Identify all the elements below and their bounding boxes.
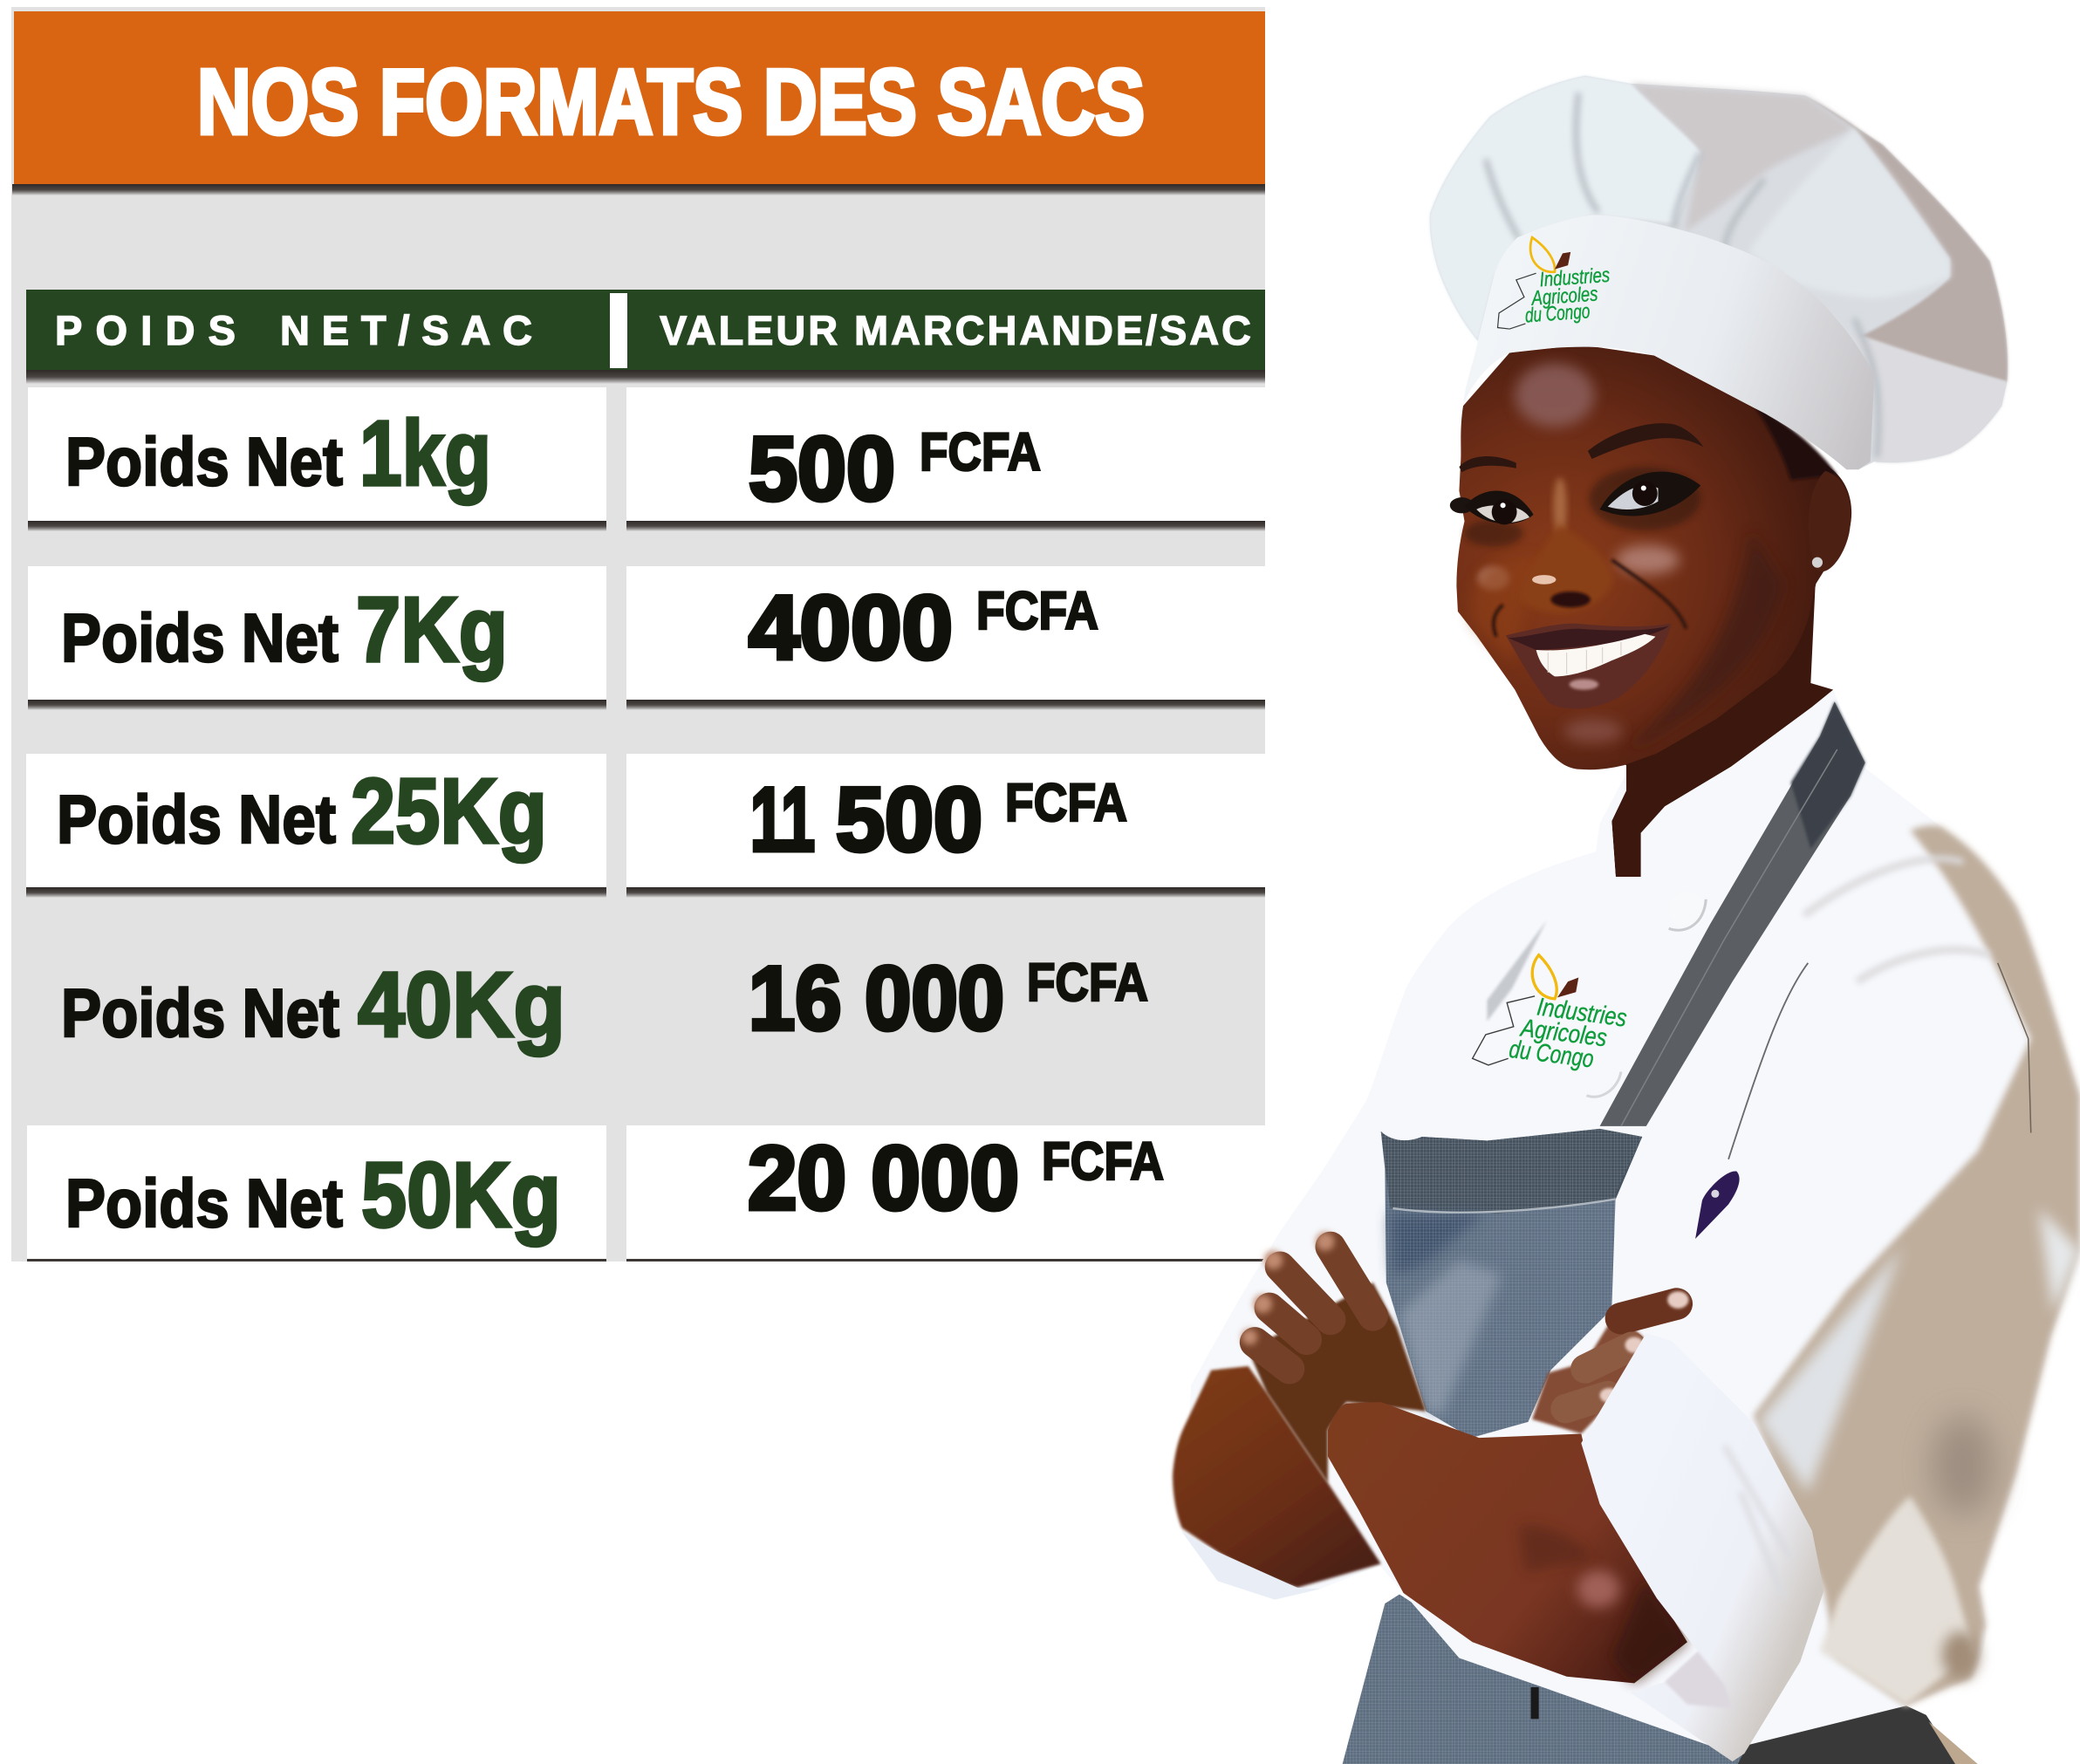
lower jacket button — [1586, 1071, 1621, 1097]
row: 1 kg: 500 — [749, 419, 895, 520]
row: 50 kg: FCFA — [1042, 1132, 1164, 1191]
chef hat — [1430, 76, 2008, 469]
leaf and cocoa mark — [1532, 955, 1578, 999]
row: 25 kg: 11 — [750, 769, 815, 871]
column heading: net weight: NET/SAC — [280, 307, 532, 353]
logo text: Agricoles — [1529, 282, 1598, 310]
row: 25 kg: Poids Net — [57, 781, 336, 858]
shoulder creases — [1804, 858, 1990, 981]
row: 40 kg: Poids Net — [61, 974, 339, 1051]
row: 25 kg: 25Kg — [351, 760, 547, 863]
logo text: Industries — [1536, 993, 1628, 1033]
column heading: net weight: POIDS — [55, 307, 236, 353]
back seam — [1998, 963, 2031, 1132]
fingertips — [1242, 1232, 1335, 1345]
row: 7 kg: Poids Net — [61, 599, 339, 676]
ear — [1808, 471, 1851, 571]
row: 25 kg: FCFA — [1005, 773, 1127, 832]
chest crease — [1487, 920, 1547, 1022]
shaded right side of sleeve — [1754, 825, 2080, 1706]
cuff opening — [1665, 1651, 1733, 1708]
row: 7 kg: FCFA — [976, 581, 1098, 640]
title banner — [12, 11, 1265, 195]
eyes — [1450, 467, 1700, 546]
row: 50 kg: 50Kg — [361, 1144, 561, 1247]
eyebrows — [1459, 423, 1703, 472]
logo text — [1508, 993, 1628, 1074]
apron bib — [1381, 1129, 1642, 1438]
row: 40 kg: 16 000 — [749, 948, 1004, 1050]
map outline — [1473, 996, 1535, 1065]
logo text: du Congo — [1508, 1036, 1595, 1074]
right cuff — [1581, 1333, 1824, 1761]
back arm — [1173, 1366, 1381, 1588]
neck — [1578, 571, 1833, 877]
beige shaded crown — [1805, 95, 2008, 382]
row: 25 kg: 500 — [836, 769, 982, 871]
map outline — [1498, 273, 1536, 329]
panel: sack formats table — [11, 7, 1265, 1261]
hair — [1754, 405, 1837, 480]
lower right puff — [1851, 332, 2007, 462]
leaf and cocoa mark — [1530, 237, 1570, 272]
illustration: smiling chef with crossed arms — [1173, 76, 2080, 1764]
front forearm — [1328, 1402, 1687, 1683]
logo on jacket — [1473, 955, 1628, 1074]
mouth — [1506, 624, 1672, 708]
jacket button — [1669, 892, 1706, 930]
row: 50 kg: Poids Net — [65, 1165, 343, 1241]
table header bar — [26, 290, 1265, 384]
skin highlights — [1471, 364, 1680, 742]
logo text: Industries — [1539, 263, 1611, 291]
row: 7 kg — [28, 566, 1265, 710]
title: NOS FORMATS DES SACS — [197, 51, 1145, 154]
row: 1 kg: FCFA — [920, 422, 1041, 482]
row: 1 kg: 1kg — [359, 402, 491, 505]
light left crown — [1430, 76, 1700, 341]
fingernails — [1600, 1291, 1688, 1403]
logo text: Agricoles — [1518, 1014, 1609, 1052]
grey upper crown — [1631, 84, 1855, 232]
under-sleeve fold — [1820, 1496, 1974, 1706]
hat band — [1463, 215, 1874, 469]
light patch on back of sleeve — [2039, 1208, 2080, 1313]
row: 25 kg — [26, 754, 1265, 898]
face — [1450, 345, 1851, 769]
row: 40 kg: FCFA — [1027, 953, 1148, 1012]
logo text — [1524, 263, 1611, 326]
left hand — [1242, 1232, 1426, 1483]
row: 1 kg: Poids Net — [65, 423, 343, 500]
right hand — [1532, 1291, 1688, 1434]
sleeve emblem — [1695, 1171, 1740, 1239]
left cuff edge — [1182, 1532, 1320, 1600]
light right puff — [1748, 128, 1950, 298]
lighter sleeve strip — [1759, 1247, 1902, 1492]
earring — [1812, 557, 1823, 568]
row: 7 kg: 7Kg — [356, 578, 508, 681]
row: 50 kg: 20 000 — [748, 1128, 1019, 1229]
shadowed jaw — [1625, 530, 1784, 749]
column heading: market value: VALEUR MARCHANDE/SAC — [660, 307, 1251, 353]
lower apron — [1343, 1595, 1978, 1764]
row: 40 kg: 40Kg — [358, 954, 565, 1056]
row: 40 kg — [61, 948, 1148, 1056]
chef jacket — [1182, 690, 2080, 1751]
cuff stitching — [1725, 1446, 1791, 1598]
row: 50 kg — [27, 1125, 1265, 1261]
sleeve seam — [1728, 963, 1808, 1159]
row: 7 kg: 4000 — [749, 578, 953, 679]
row: 1 kg — [28, 387, 1265, 531]
logo text: du Congo — [1524, 299, 1591, 326]
logo on hat — [1498, 237, 1611, 329]
arm shading — [1519, 1525, 1687, 1683]
puffed crown — [1430, 76, 2008, 469]
smile lines — [1494, 560, 1686, 637]
apron strap — [1600, 701, 1865, 1126]
nose — [1522, 524, 1613, 612]
column heading: net weight — [55, 307, 532, 353]
fold shadows — [1486, 92, 1878, 458]
